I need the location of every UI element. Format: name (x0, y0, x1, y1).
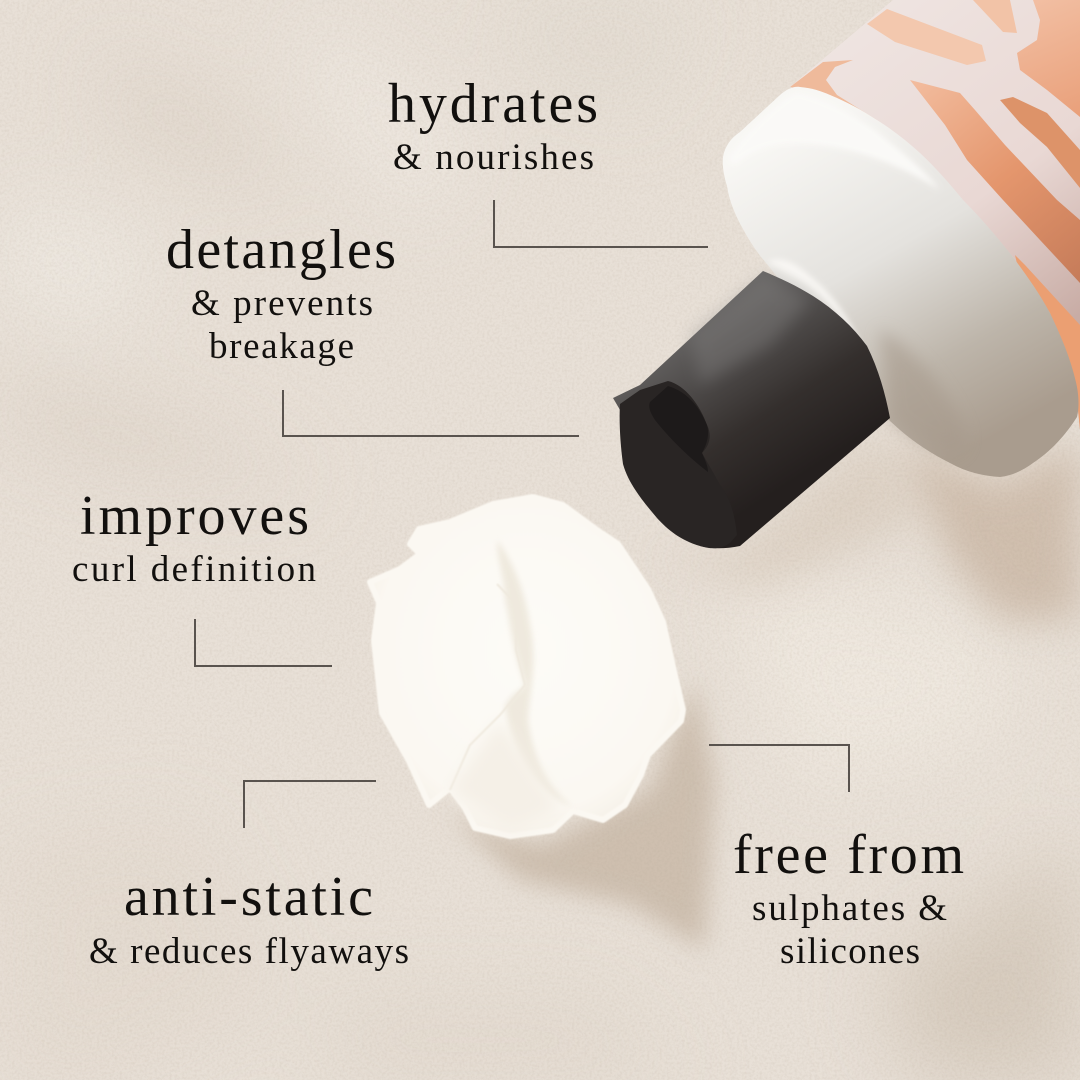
callout: anti-static (89, 781, 409, 972)
brush stroke: upper band (867, 9, 986, 65)
white shoulder collar (723, 87, 1078, 477)
brush stroke: top small (973, 0, 1017, 33)
cream swatch (370, 497, 683, 836)
dispensing cap body (613, 271, 890, 548)
brush stroke: lower right (1015, 255, 1080, 430)
brush stroke: second band (1000, 97, 1080, 188)
brush stroke: left wedge (790, 60, 877, 120)
callout: free from: silicones (780, 931, 920, 972)
collar neck ring (767, 259, 880, 405)
bottle body: peach label with pale brush strokes (780, 0, 1080, 440)
callout: hydrates: & nourishes (393, 137, 594, 178)
brush stroke: main band (910, 80, 1080, 283)
callout: detangles (166, 219, 579, 436)
bottle (613, 0, 1080, 548)
callout: anti-static: anti-static (124, 866, 373, 928)
callout: free from (709, 745, 964, 972)
callout: free from: sulphates & (752, 888, 947, 929)
callout: hydrates: hydrates (388, 73, 598, 135)
callout: improves: curl definition (72, 549, 316, 590)
callout: detangles: detangles (166, 219, 396, 281)
cream flap edge (450, 584, 525, 790)
collar rim highlight (728, 93, 940, 190)
callout: anti-static: & reduces flyaways (89, 931, 409, 972)
brush stroke: top right (1017, 0, 1080, 117)
callout: improves: improves (80, 485, 309, 547)
cap end face (620, 381, 737, 548)
cap recess (649, 386, 708, 472)
callout: detangles: & prevents (191, 283, 373, 324)
cream fold shading (497, 540, 575, 808)
cap texture highlight (690, 275, 810, 385)
collar inner shadow (880, 330, 965, 455)
callout: hydrates (388, 73, 708, 247)
cream lower shade (450, 720, 560, 832)
callout: improves (72, 485, 332, 666)
callout: detangles: breakage (209, 326, 354, 367)
callout: free from: free from (733, 824, 964, 886)
